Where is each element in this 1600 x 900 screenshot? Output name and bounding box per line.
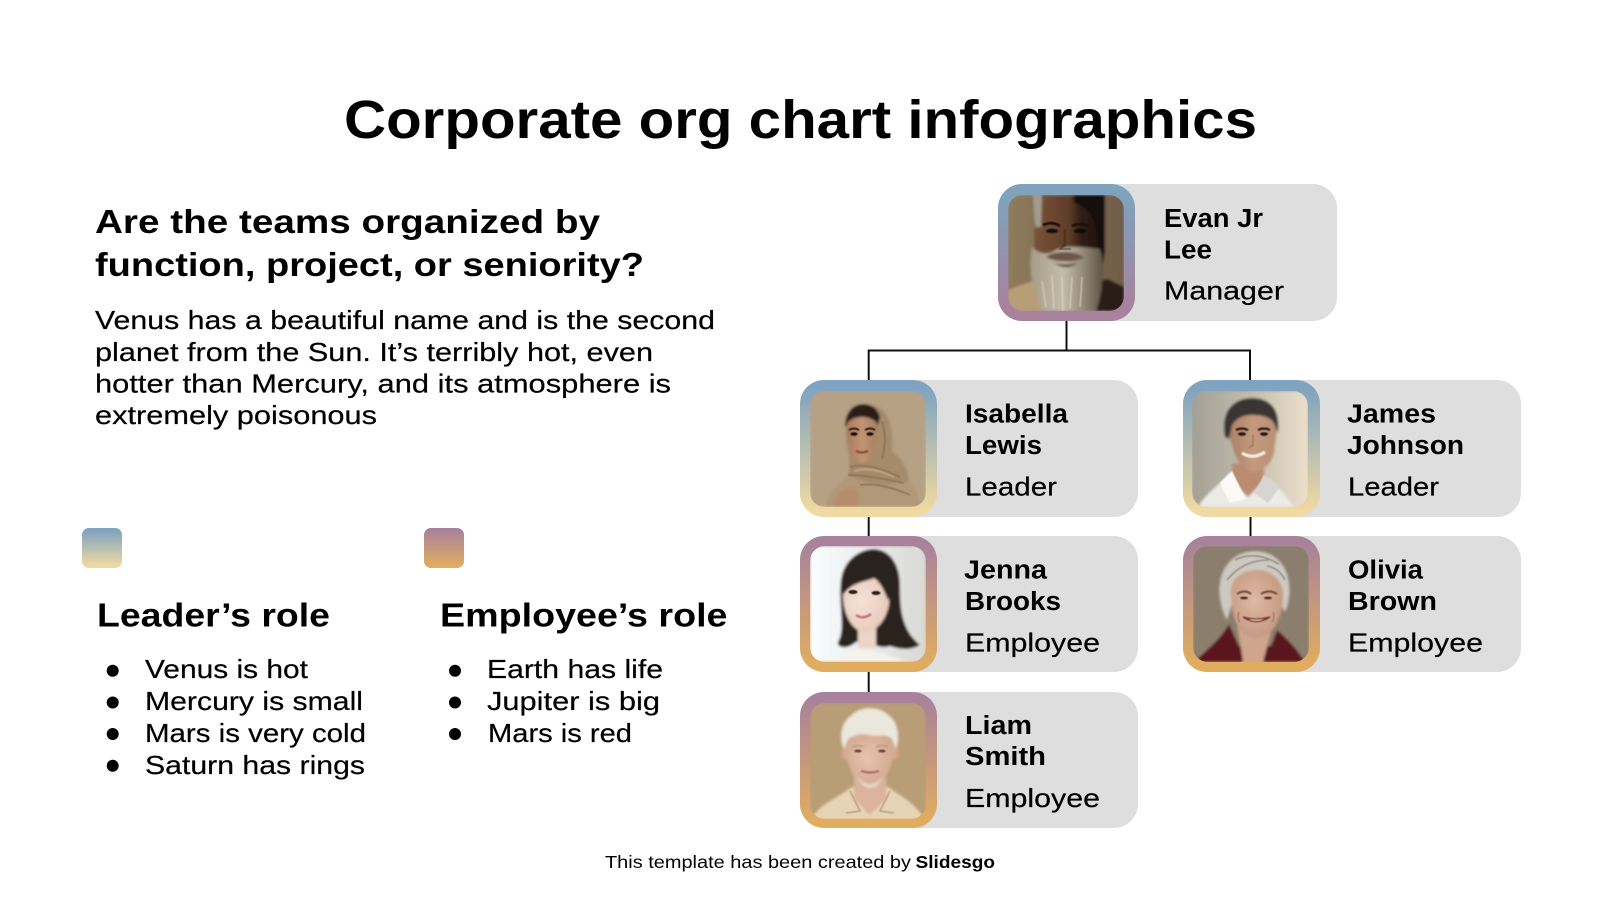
card: Olivia Brown (1183, 536, 1521, 672)
bullet list: employee: Mars is red (488, 718, 632, 748)
bullet list: leader (107, 654, 366, 780)
card: Isabella Lewis (800, 380, 1138, 517)
portrait: Evan (1008, 195, 1124, 311)
name and role: Brooks (965, 588, 1061, 616)
portrait: Olivia (1193, 546, 1309, 662)
text block: description: planet from the Sun. It’s terribly hot, even (95, 337, 653, 367)
name and role: Johnson (1347, 432, 1464, 460)
bullet list: employee: Jupiter is big (487, 686, 660, 716)
portrait: Jenna (810, 546, 926, 662)
portrait: Liam (810, 703, 926, 819)
bullet list: leader: Saturn has rings (145, 750, 365, 780)
footer credit: Slidesgo (916, 852, 995, 872)
name and role (965, 400, 1069, 502)
text block: description: hotter than Mercury, and its atmosphere is (95, 368, 671, 398)
text block: description: extremely poisonous (95, 400, 377, 430)
name and role: Lee (1164, 236, 1212, 264)
bullet list: leader: Mercury is small (145, 686, 363, 716)
name and role: Liam (965, 712, 1032, 740)
name and role: Brown (1348, 588, 1437, 616)
name and role: Lewis (965, 432, 1042, 460)
name and role: Leader (1348, 472, 1439, 502)
card: Evan Jr Lee (998, 184, 1337, 321)
name and role (1348, 556, 1483, 658)
heading: question (95, 203, 644, 283)
legend swatch: employee (424, 528, 464, 568)
photo frame (998, 184, 1135, 321)
photo frame (800, 380, 937, 517)
name and role: Manager (1164, 276, 1284, 306)
name and role: Employee (1348, 628, 1483, 658)
name and role: Evan Jr (1164, 205, 1263, 233)
heading: leader's role: Leader’s role (97, 596, 330, 634)
name and role: Olivia (1348, 556, 1424, 584)
slide (82, 99, 1521, 872)
heading: question: function, project, or seniority? (95, 246, 644, 283)
name and role: James (1347, 400, 1436, 428)
name and role: Employee (965, 628, 1100, 658)
heading: question: Are the teams organized by (95, 203, 601, 240)
panel: leader's role (82, 528, 366, 780)
photo frame (800, 692, 937, 828)
name and role: Leader (965, 472, 1057, 502)
bullet list: leader: Venus is hot (145, 654, 309, 684)
name and role (1164, 205, 1284, 306)
heading: employee's role: Employee’s role (440, 596, 728, 634)
connector lines (869, 320, 1250, 693)
portrait: James (1192, 391, 1308, 507)
name and role (1347, 400, 1464, 502)
name and role (965, 712, 1100, 813)
text block: description (95, 305, 715, 430)
footer credit: This template has been created by (605, 852, 911, 872)
name and role: Isabella (965, 400, 1069, 428)
footer credit (605, 852, 995, 872)
card: Jenna Brooks (800, 536, 1138, 672)
bullet list: employee: Earth has life (487, 654, 663, 684)
photo frame (800, 536, 937, 672)
title: Corporate org chart infographics (344, 90, 1257, 150)
panel: employee's role (424, 528, 728, 748)
photo frame (1183, 380, 1320, 517)
card: Liam Smith (800, 692, 1138, 828)
text block: description: Venus has a beautiful name and is the second (95, 305, 715, 335)
name and role: Employee (965, 783, 1100, 813)
legend swatch: leader (82, 528, 122, 568)
photo frame (1183, 536, 1320, 672)
bullet list: employee (449, 654, 663, 748)
name and role: Smith (965, 743, 1046, 771)
name and role: Jenna (964, 556, 1048, 584)
name and role (964, 556, 1100, 658)
card: James Johnson (1183, 380, 1521, 517)
bullet list: leader: Mars is very cold (145, 718, 366, 748)
portrait: Isabella (810, 391, 926, 507)
